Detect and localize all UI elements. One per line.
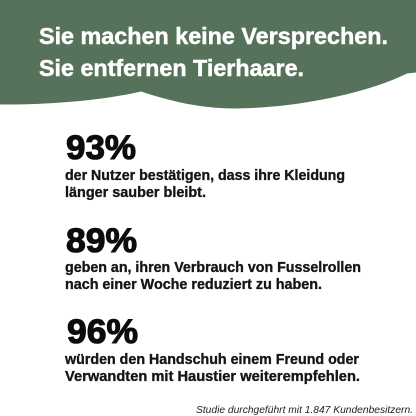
headline [39,23,388,81]
header banner [0,0,416,108]
headline: Sie entfernen Tierhaare. [39,55,304,81]
stat: 93%: länger sauber bleibt. [65,185,206,201]
footnote: Studie durchgeführt mit 1.847 Kundenbesitzern. [196,404,413,416]
headline: Sie machen keine Versprechen. [39,23,388,49]
stat: 93%: 93% [66,129,136,167]
stat: 96%: 96% [67,313,138,351]
stat: 96%: würden den Handschuh einem Freund oder [64,352,359,368]
stat: 93% [65,129,345,201]
stat: 93%: der Nutzer bestätigen, dass ihre Kleidung [65,168,345,184]
stat: 89%: nach einer Woche reduziert zu haben. [65,277,322,293]
stat: 96%: Verwandten mit Haustier weiterempfehlen. [65,369,360,385]
stat: 89% [65,222,361,293]
stat: 96% [64,313,360,385]
stat: 89%: geben an, ihren Verbrauch von Fusselrollen [65,260,361,276]
stat: 89%: 89% [66,222,137,260]
